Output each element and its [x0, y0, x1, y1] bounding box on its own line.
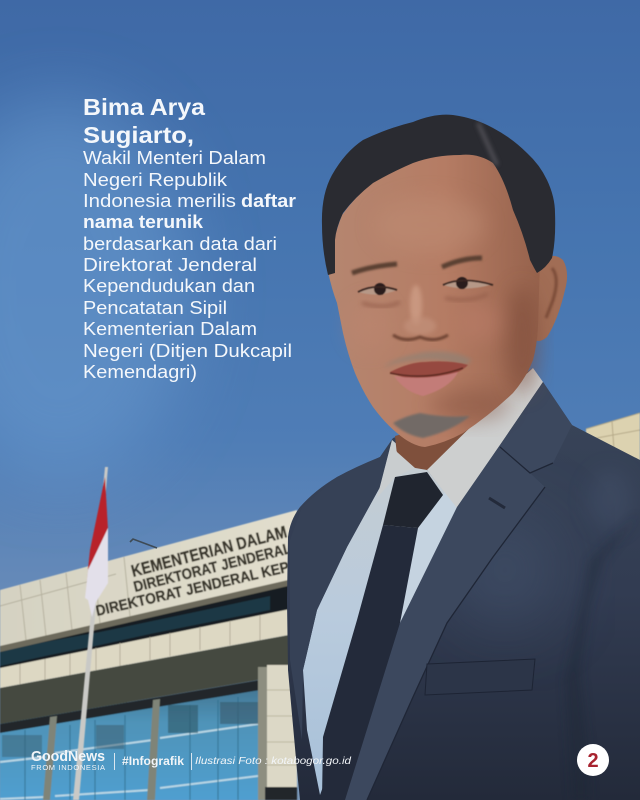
windows	[0, 680, 260, 800]
collar right	[427, 368, 543, 508]
body text: nama terunik	[83, 212, 204, 232]
body text: daftar	[241, 191, 296, 211]
dark wall	[0, 633, 300, 724]
buttonhole	[489, 498, 505, 508]
window strip	[0, 575, 300, 672]
shirt	[303, 440, 457, 795]
left eye bag	[362, 302, 400, 306]
sign text: DIREKTORAT JENDERAL	[132, 540, 293, 596]
body text: Negeri Republik	[83, 170, 228, 190]
jacket body	[287, 382, 640, 800]
page number badge	[577, 744, 609, 776]
left lapel	[290, 440, 392, 740]
heading: name: Bima Arya	[83, 94, 206, 120]
body text: Pencatatan Sipil	[83, 298, 227, 318]
logo: GoodNews: GoodNews	[31, 748, 105, 765]
nose	[393, 285, 448, 340]
white stripe	[85, 528, 108, 617]
cream block	[267, 665, 297, 787]
text block: intro	[83, 94, 296, 382]
building far right	[586, 413, 640, 480]
neck	[395, 368, 540, 470]
face	[328, 150, 540, 447]
right lapel	[345, 382, 572, 800]
sleeve shadow	[565, 513, 640, 800]
body text: Direktorat Jenderal	[83, 255, 257, 275]
street lamp	[130, 539, 157, 548]
breast pocket	[425, 659, 535, 695]
sign text	[94, 522, 293, 620]
cream band	[0, 607, 300, 688]
photo credit: Ilustrasi Foto : kotabogor.go.id	[195, 755, 352, 767]
hashtag: #Infografik	[122, 756, 185, 768]
tie blade	[322, 525, 418, 800]
sleeve highlight	[588, 470, 632, 530]
footer: brand and credits	[31, 748, 352, 772]
goatee	[393, 413, 470, 438]
roof signage band	[0, 510, 297, 648]
body text: Negeri (Ditjen Dukcapil	[83, 341, 292, 361]
hair	[322, 115, 555, 275]
body text: Kependudukan dan	[83, 276, 255, 296]
ear	[535, 256, 567, 341]
moustache	[383, 351, 472, 368]
left eye	[358, 283, 397, 295]
body text: Indonesia merilis	[83, 191, 236, 211]
body text: berdasarkan data dari	[83, 234, 277, 254]
body text: Kementerian Dalam	[83, 319, 257, 339]
flag and pole	[73, 467, 108, 800]
heading: name: Sugiarto,	[83, 122, 194, 148]
body text: Wakil Menteri Dalam	[83, 148, 266, 168]
page number badge: 2	[587, 750, 599, 772]
red stripe	[85, 477, 108, 598]
sign text: KEMENTERIAN DALAM	[129, 522, 289, 581]
shirt right panel	[400, 492, 460, 623]
right eye bag	[445, 294, 488, 300]
body text: Kemendagri)	[83, 362, 197, 382]
right eye	[443, 277, 493, 289]
logo: GoodNews	[31, 748, 105, 772]
columns	[43, 716, 57, 800]
logo: GoodNews: FROM INDONESIA	[31, 763, 105, 772]
face shading	[350, 197, 538, 421]
chest highlight	[455, 515, 555, 625]
pole	[73, 467, 108, 800]
collar left	[377, 440, 415, 498]
eyebrows	[352, 264, 397, 273]
body text	[83, 148, 296, 382]
sign text: DIREKTORAT JENDERAL KEP	[94, 559, 291, 620]
man in suit	[287, 115, 640, 800]
tie knot	[383, 472, 443, 528]
lips	[390, 361, 468, 396]
heading: name	[83, 94, 206, 148]
photo: ministry building	[0, 413, 640, 800]
